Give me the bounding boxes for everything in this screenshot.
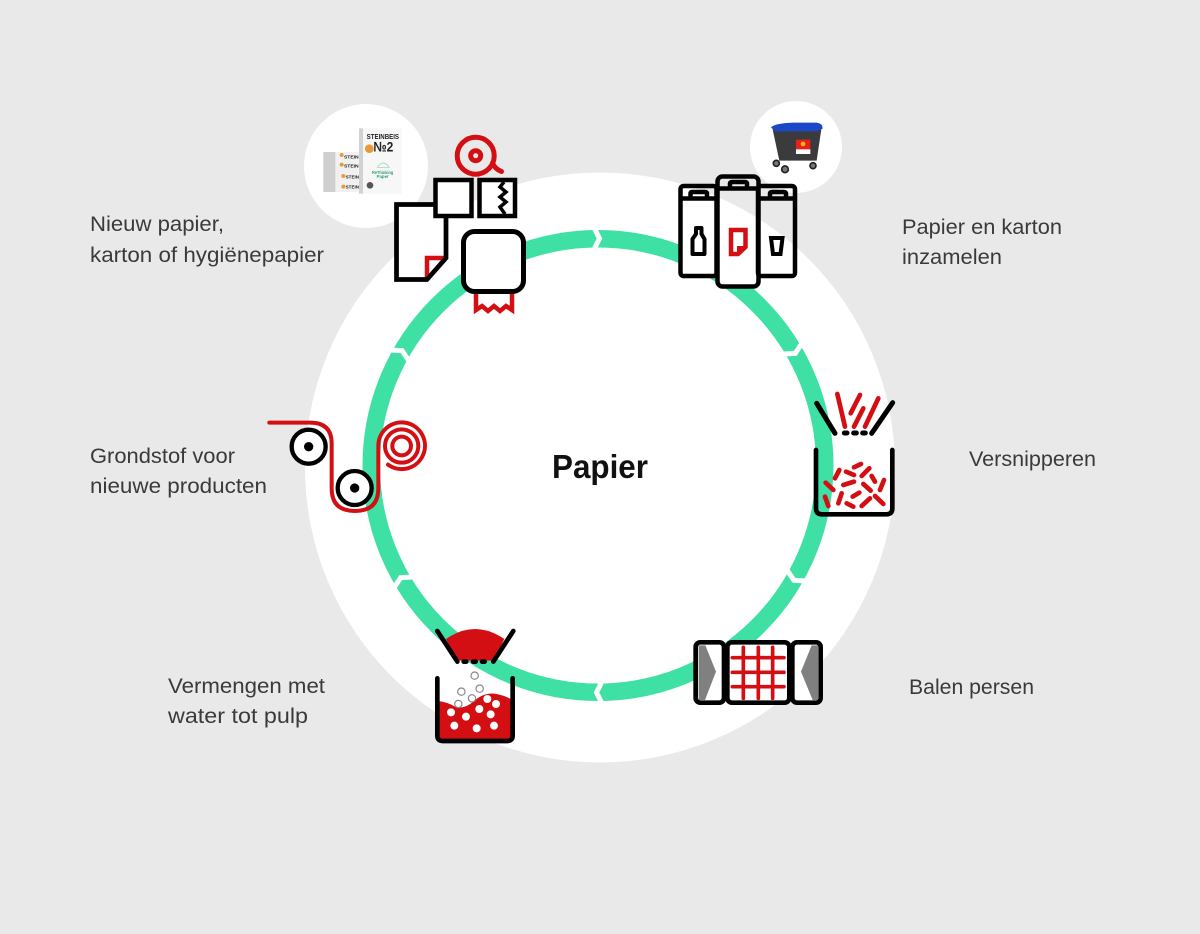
photo circle: paper products: STEIN (346, 174, 359, 180)
icon: bottle (692, 228, 704, 254)
photo circle: paper products: STEIN (344, 164, 359, 170)
icon: right bin (758, 186, 795, 276)
icon: red paper roll (457, 137, 502, 174)
paper web and reel (269, 422, 425, 511)
icon: cup (771, 238, 782, 254)
shredded paper (825, 464, 884, 507)
icon: red document (731, 230, 746, 255)
label: shredding: Versnipperen (969, 448, 1096, 471)
photo circle: paper products: ReThinking (372, 170, 394, 175)
photo circle: paper products (304, 104, 428, 228)
panel: white circle (305, 172, 895, 762)
icon: middle bin (718, 176, 758, 286)
label: collection: Papier en karton (902, 216, 1062, 239)
photo circle: paper products: №2 (373, 138, 394, 154)
tank (437, 678, 513, 741)
label: raw material (90, 445, 267, 498)
icon: tissue paper (476, 293, 512, 311)
photo circle: paper products: STEIN (346, 185, 359, 191)
funnel contents (446, 629, 504, 661)
roller two (338, 471, 372, 505)
shreds falling (837, 394, 878, 427)
icon: paper machine rollers (269, 422, 425, 511)
central title: Papier (552, 448, 648, 485)
right press plate (792, 642, 821, 703)
icon: left bin (680, 186, 716, 276)
label: pulp: Vermengen met (168, 675, 325, 698)
icon: collection bins (678, 174, 798, 289)
icon: baling press (696, 642, 821, 703)
cycle ring with arrows (371, 226, 825, 704)
particles in pulp (447, 695, 500, 732)
label: pulp (167, 675, 325, 728)
photo circle: paper products: Paper (377, 174, 389, 179)
label: raw material: nieuwe producten (90, 475, 267, 498)
photo circle: paper products: STEINBEIS (367, 132, 399, 141)
label: new paper: Nieuw papier, (90, 213, 224, 236)
label: pulp: water tot pulp (167, 705, 308, 728)
roller one (292, 430, 326, 464)
falling particles (455, 672, 483, 708)
icon: square sheet (436, 180, 472, 216)
label: new paper: karton of hygiënepapier (90, 244, 324, 267)
paper bale (727, 642, 789, 703)
icon: torn sheet (480, 180, 515, 216)
funnel (437, 631, 513, 662)
icon: new paper products (396, 137, 524, 311)
funnel (817, 403, 893, 433)
photo circle: container (750, 101, 842, 193)
label: raw material: Grondstof voor (90, 445, 235, 468)
icon: tissue box (464, 232, 524, 292)
label: collection: inzamelen (902, 246, 1002, 269)
label: collection (902, 216, 1062, 269)
icon: shredder (816, 394, 893, 514)
photo circle: paper products: STEIN (344, 154, 359, 160)
shredded paper container (816, 450, 892, 514)
label: new paper (90, 213, 324, 267)
icon: sheet of paper (396, 204, 446, 280)
water pulp (438, 694, 511, 740)
label: baling: Balen persen (909, 676, 1034, 699)
icon: pulp mixer (437, 629, 513, 741)
left press plate (696, 642, 724, 703)
